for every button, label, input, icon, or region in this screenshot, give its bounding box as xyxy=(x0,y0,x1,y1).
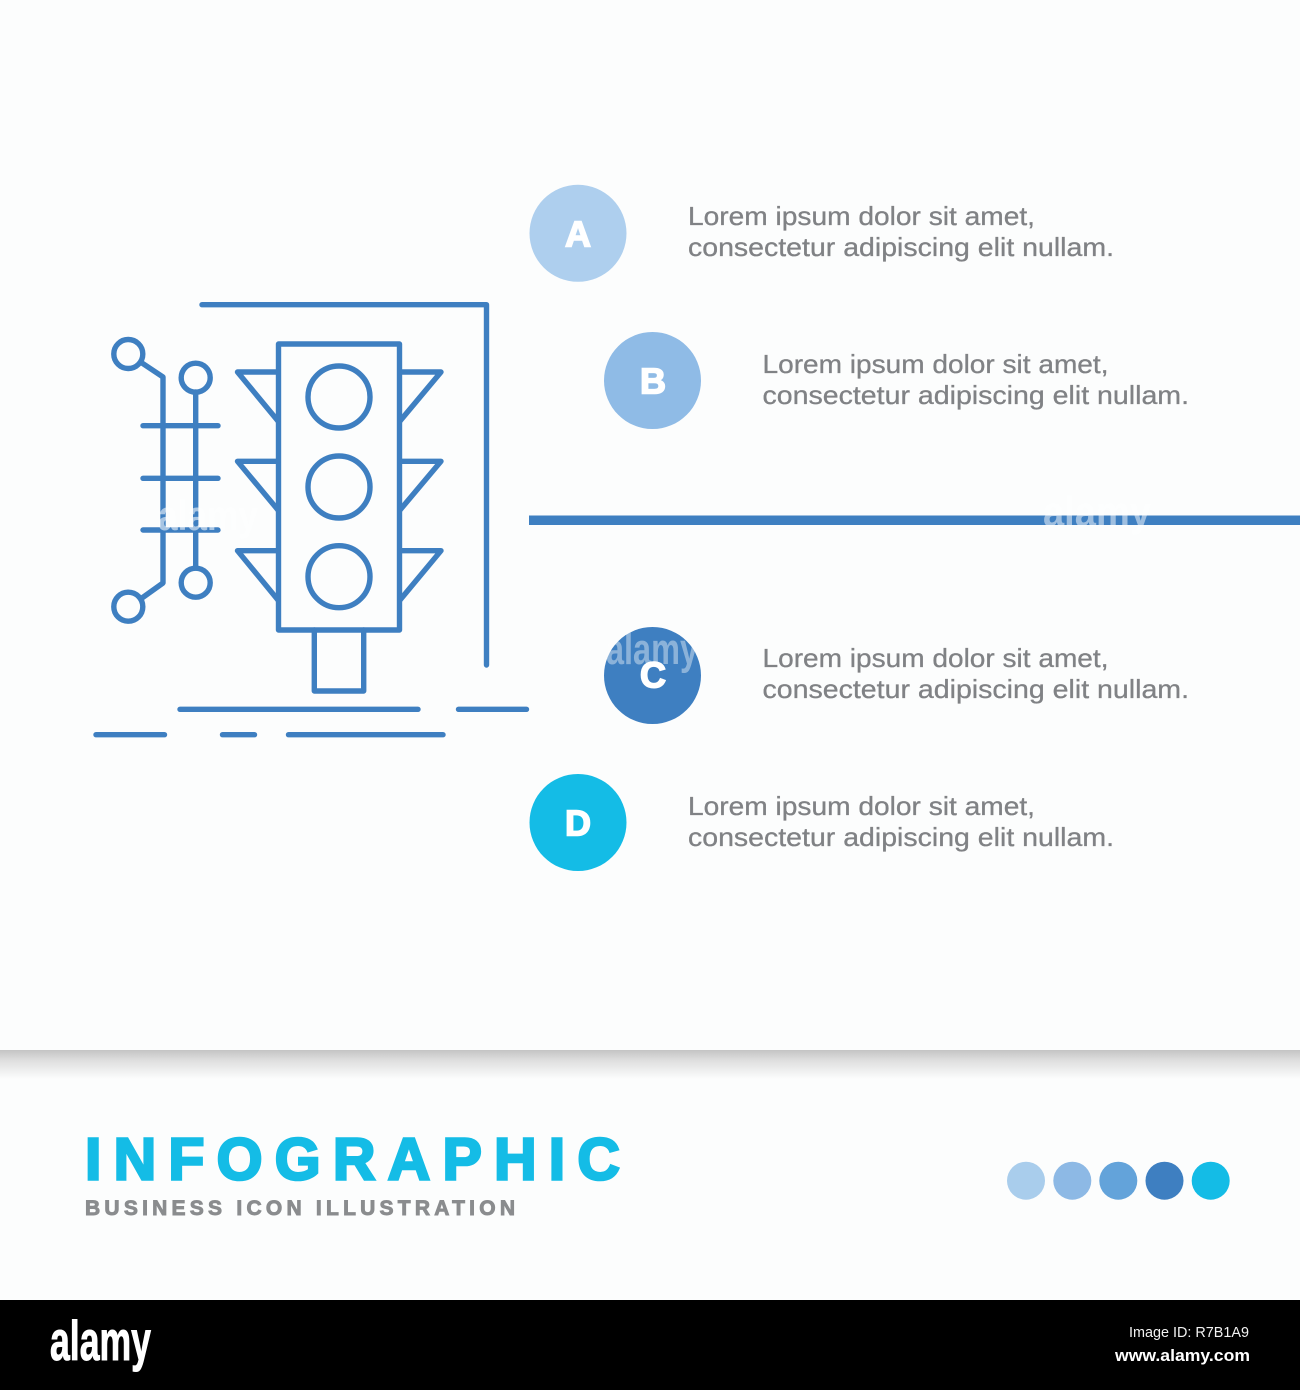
badge D xyxy=(530,774,626,871)
icon: signal lamps xyxy=(308,366,370,608)
alamy logo: alamy xyxy=(50,1309,151,1372)
badge B xyxy=(604,332,701,429)
text block A: Lorem ipsum dolor sit amet, xyxy=(688,201,1035,231)
subtitle: BUSINESS ICON ILLUSTRATION xyxy=(85,1197,515,1220)
step A xyxy=(530,185,1114,282)
text block B: Lorem ipsum dolor sit amet, xyxy=(762,349,1108,379)
step C xyxy=(604,627,1189,724)
step D xyxy=(530,774,1114,871)
step B xyxy=(604,332,1189,429)
text block D: consectetur adipiscing elit nullam. xyxy=(688,822,1114,852)
text block A: consectetur adipiscing elit nullam. xyxy=(688,232,1114,262)
text block B: consectetur adipiscing elit nullam. xyxy=(762,380,1189,410)
watermark band: alamy xyxy=(606,625,698,674)
letter B: B xyxy=(640,360,666,402)
watermark band xyxy=(158,488,1152,674)
title: INFOGRAPHIC xyxy=(85,1126,620,1192)
badge C xyxy=(604,627,701,724)
watermark band: alamy xyxy=(1043,488,1152,535)
text block C: consectetur adipiscing elit nullam. xyxy=(762,674,1189,704)
badge A xyxy=(530,185,626,282)
icon: corner bracket xyxy=(202,305,486,665)
letter D: D xyxy=(565,802,591,844)
divider bar xyxy=(529,516,1300,525)
image id: Image ID: R7B1A9 xyxy=(1129,1324,1249,1341)
letter C: C xyxy=(640,654,666,696)
colour dots xyxy=(1007,1162,1230,1200)
icon: route map xyxy=(114,340,218,621)
icon: signal housing xyxy=(278,344,400,630)
letter A: A xyxy=(565,214,591,254)
icon: road markings xyxy=(96,709,526,735)
icon: right visors xyxy=(400,372,441,600)
text block D: Lorem ipsum dolor sit amet, xyxy=(688,791,1035,821)
website: www.alamy.com xyxy=(1114,1346,1250,1365)
watermark band: alamy xyxy=(158,492,259,539)
icon: traffic light with road map xyxy=(96,305,526,735)
footer shadow band xyxy=(0,1050,1300,1079)
text block C: Lorem ipsum dolor sit amet, xyxy=(762,643,1108,673)
icon: signal pole xyxy=(314,630,364,691)
icon: left visors xyxy=(238,372,278,600)
footer bar xyxy=(0,1300,1300,1390)
